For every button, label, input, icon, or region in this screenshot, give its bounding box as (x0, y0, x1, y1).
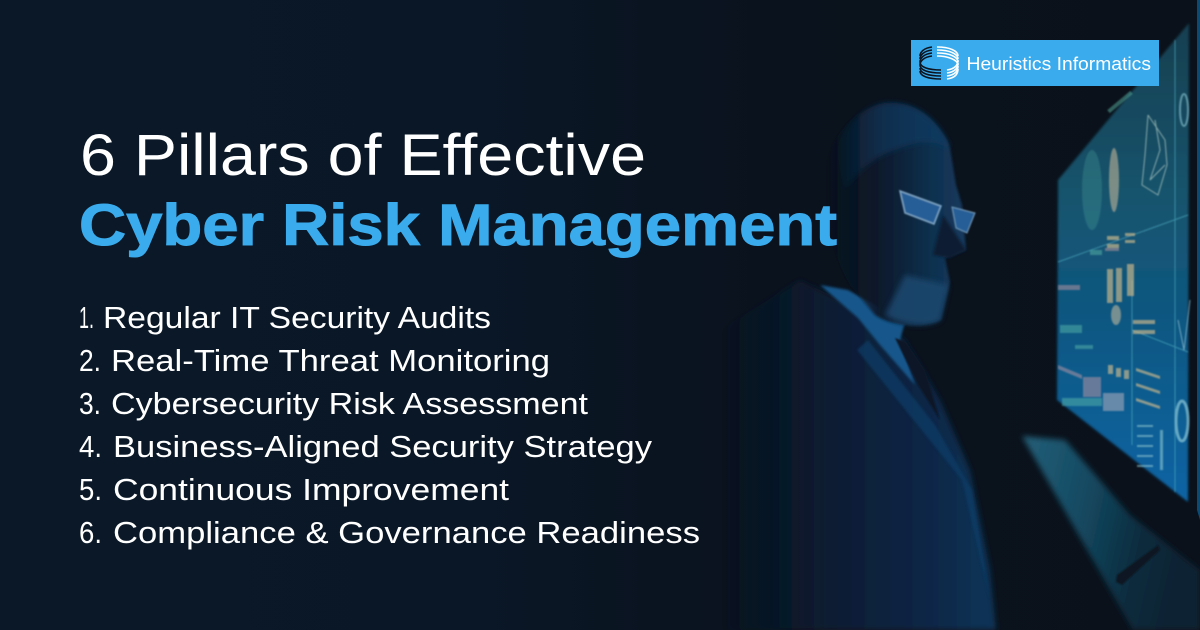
lapel highlight (857, 340, 990, 600)
title: Cyber Risk Management (79, 193, 837, 258)
list of six pillars: 3. (79, 386, 101, 421)
icon: logo rings (920, 47, 958, 79)
list of six pillars (79, 300, 700, 550)
list of six pillars: 1. (79, 300, 94, 335)
title: 6 Pillars of Effective (80, 123, 646, 188)
photo: man in suit (720, 103, 996, 630)
list of six pillars: 5. (79, 472, 102, 507)
list of six pillars: Continuous Improvement (113, 472, 509, 507)
photo: monitor screen (1057, 0, 1200, 520)
beard (885, 275, 948, 325)
shirt collar (820, 285, 915, 385)
list of six pillars: 4. (79, 429, 102, 464)
tie (895, 338, 940, 420)
glasses (900, 191, 941, 224)
title (79, 123, 837, 258)
list of six pillars: Cybersecurity Risk Assessment (111, 386, 588, 421)
head and face (824, 103, 966, 325)
list of six pillars: 6. (79, 515, 102, 550)
hair (835, 103, 950, 190)
photo: desk (1022, 436, 1200, 630)
suit (720, 280, 996, 630)
logo (911, 40, 1159, 86)
logo wordmark: Heuristics Informatics (966, 54, 1151, 74)
pen (1116, 545, 1160, 585)
list of six pillars: Regular IT Security Audits (103, 300, 491, 335)
list of six pillars: Real-Time Threat Monitoring (111, 343, 550, 378)
list of six pillars: 2. (79, 343, 101, 378)
list of six pillars: Compliance & Governance Readiness (113, 515, 700, 550)
nose shadow (933, 215, 966, 258)
list of six pillars: Business-Aligned Security Strategy (113, 429, 653, 464)
